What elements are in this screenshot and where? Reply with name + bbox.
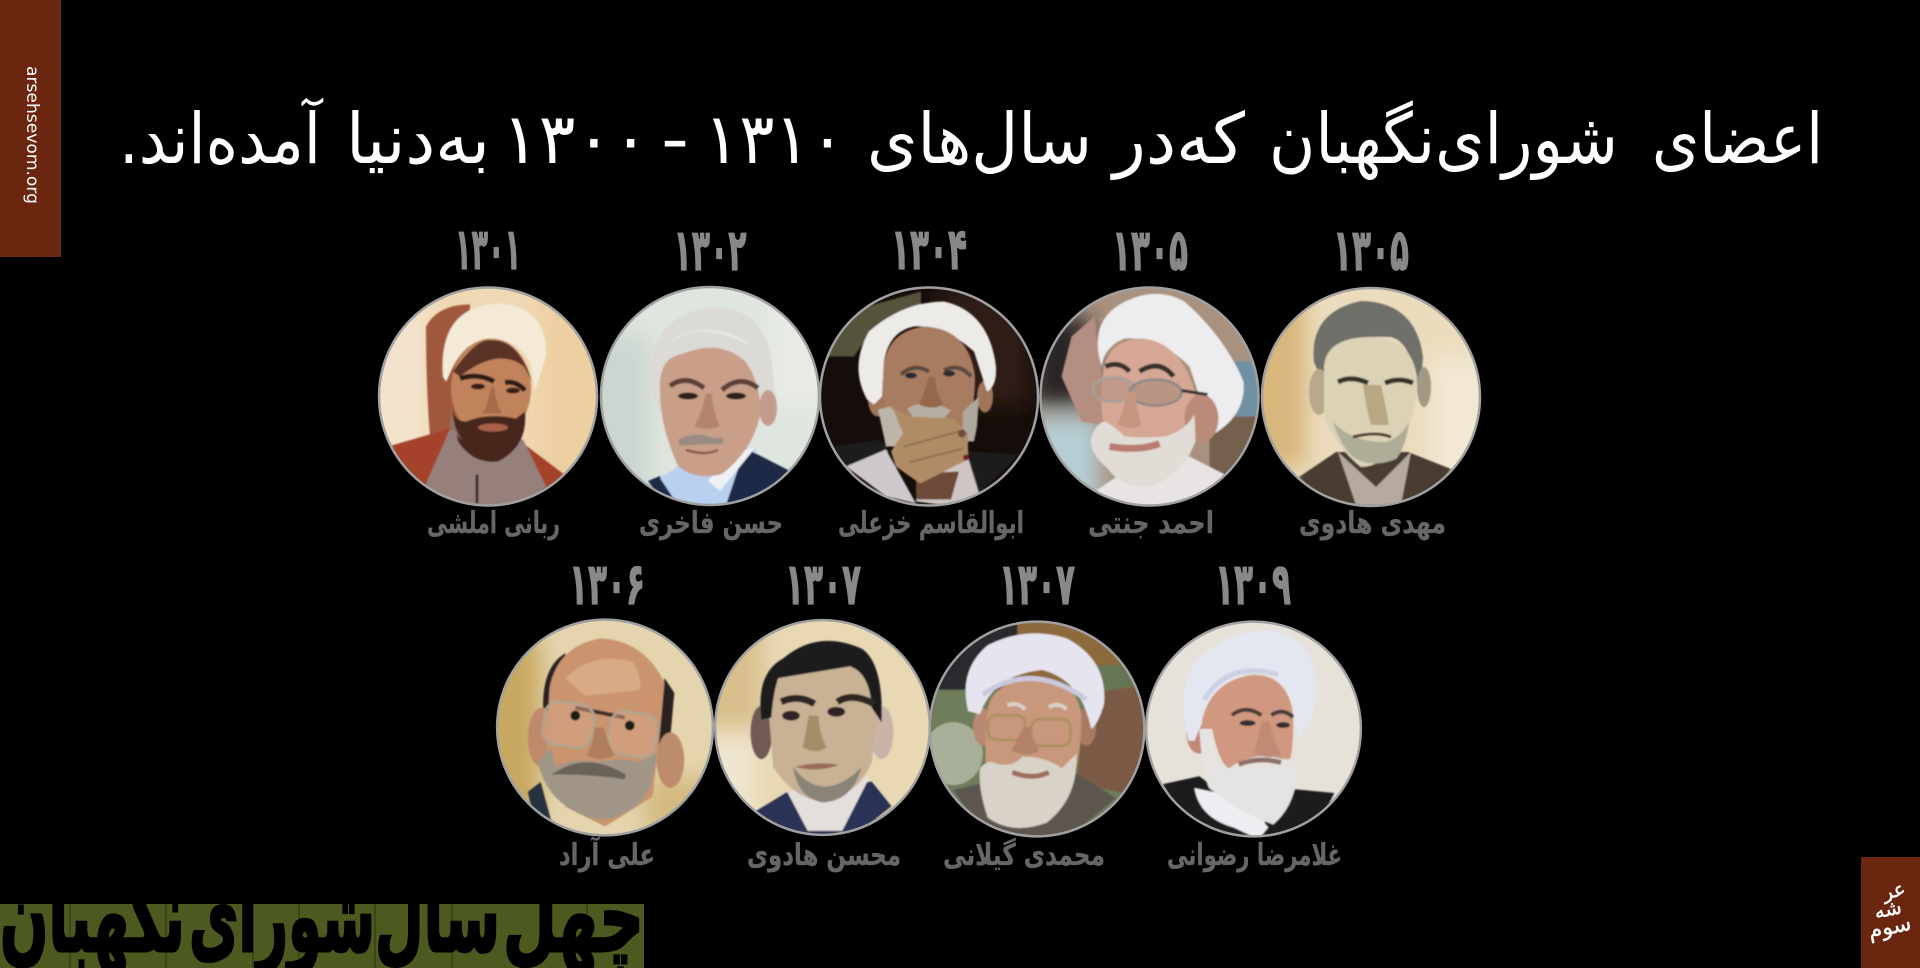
member: علی آراد: علی آراد (559, 836, 655, 873)
member: حسن فاخری: ۱۳۰۲ (674, 216, 746, 284)
logo tab: شه (1872, 894, 1904, 924)
member: غلامرضا رضوانی: غلامرضا رضوانی (1167, 838, 1342, 873)
member: حسن فاخری: حسن فاخری (639, 506, 783, 541)
title: به‌دنیا (346, 98, 490, 180)
member: احمد جنتی (1039, 232, 1260, 538)
member: غلامرضا رضوانی (1145, 550, 1362, 873)
banner: چهل سال شورای نگهبان (0, 904, 644, 968)
photo: احمد جنتی (1030, 286, 1264, 512)
member: محسن هادوی: محسن هادوی (747, 838, 901, 873)
title: اعضای (1652, 98, 1823, 180)
member: مهدی هادوی: ۱۳۰۵ (1333, 216, 1409, 284)
photo: ابوالقاسم خزعلی (819, 286, 1039, 506)
side tab: website: arsehsevom.org (22, 66, 42, 204)
logo tab (1859, 857, 1920, 968)
member: ابوالقاسم خزعلی: ابوالقاسم خزعلی (838, 506, 1024, 541)
member: محمدی گیلانی: ۱۳۰۷ (999, 550, 1075, 618)
member: مهدی هادوی (1260, 232, 1482, 541)
title (119, 97, 1823, 180)
member: ابوالقاسم خزعلی: ۱۳۰۴ (891, 215, 967, 283)
member: مهدی هادوی: مهدی هادوی (1299, 506, 1446, 541)
member: محمدی گیلانی: محمدی گیلانی (943, 837, 1105, 873)
member: احمد جنتی: احمد جنتی (1088, 506, 1214, 541)
title: شورای‌نگهبان (1269, 98, 1618, 180)
photo: محسن هادوی (694, 619, 931, 838)
member: احمد جنتی: ۱۳۰۵ (1112, 216, 1188, 284)
title: آمده‌اند. (119, 97, 324, 180)
member: ربانی املشی: ۱۳۰۱ (455, 215, 521, 283)
member: حسن فاخری (600, 232, 820, 540)
logo tab: سوم (1866, 911, 1914, 944)
title: ۱۳۰۰ (502, 98, 649, 180)
photo: محمدی گیلانی (924, 621, 1145, 839)
member: ابوالقاسم خزعلی (819, 215, 1039, 541)
member: علی آراد: ۱۳۰۶ (569, 550, 645, 618)
member: غلامرضا رضوانی: ۱۳۰۹ (1215, 550, 1291, 618)
title: سال‌های (867, 98, 1092, 180)
member: محمدی گیلانی (924, 550, 1145, 873)
photo: مهدی هادوی (1260, 286, 1482, 508)
member: ربانی املشی (378, 232, 598, 541)
member: ربانی املشی: ربانی املشی (427, 506, 560, 541)
side tab: website (0, 0, 61, 257)
title: که‌در (1110, 98, 1246, 180)
photo: حسن فاخری (600, 286, 820, 506)
photo: ربانی املشی (378, 286, 598, 507)
photo: علی آراد (496, 618, 714, 837)
member: علی آراد (496, 566, 714, 873)
logo tab: عر (1879, 876, 1908, 905)
title: - (661, 98, 689, 180)
title: ۱۳۱۰ (704, 98, 845, 180)
photo: غلامرضا رضوانی (1145, 621, 1362, 839)
member: محسن هادوی: ۱۳۰۷ (785, 550, 861, 618)
member: محسن هادوی (714, 566, 930, 873)
